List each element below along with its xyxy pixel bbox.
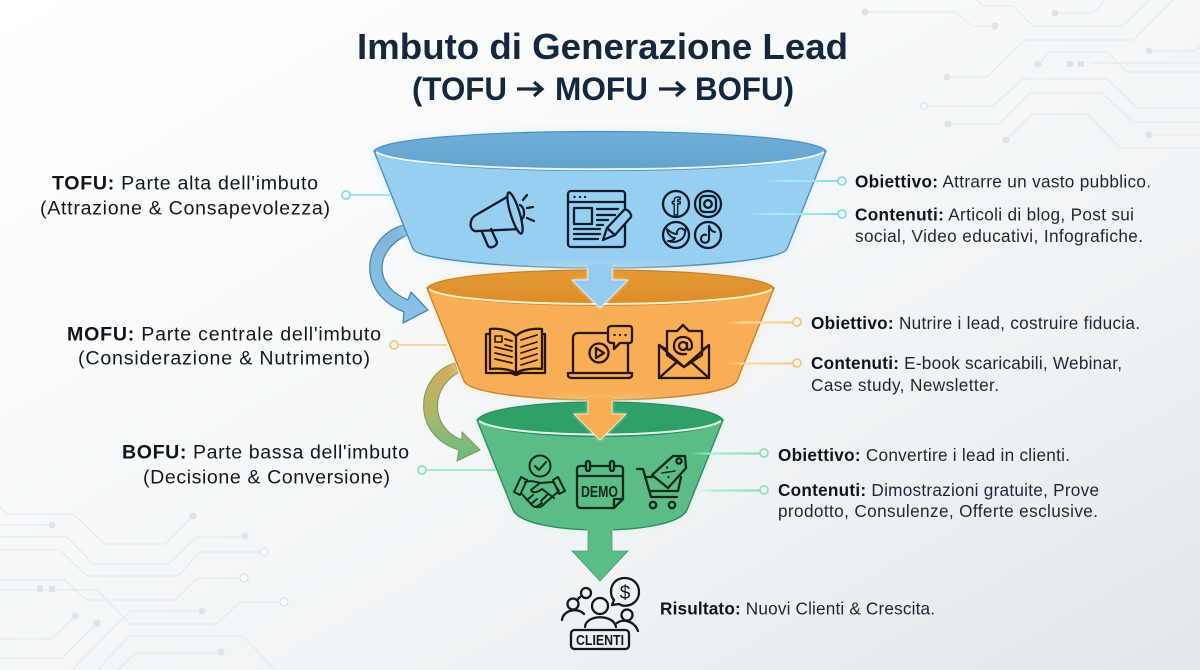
text: TOFU contents	[855, 204, 1143, 246]
text: TOFU label	[40, 172, 330, 220]
text: TOFU label: (Attrazione & Consapevolezza)	[40, 198, 330, 220]
text: MOFU label: MOFU: Parte centrale dell'imbuto	[67, 324, 381, 346]
text: MOFU label	[67, 324, 381, 370]
connector: TOFU contents	[748, 210, 846, 218]
text: BOFU objective: Obiettivo: Convertire i lead in clienti.	[778, 445, 1070, 465]
icon: laptop webinar	[568, 326, 632, 378]
icon: megaphone	[471, 191, 534, 247]
text: result: Risultato: Nuovi Clienti & Crescita.	[660, 598, 935, 618]
icon: email envelope	[659, 325, 709, 378]
icon: demo calendar: DEMO	[581, 484, 618, 501]
icon: demo calendar	[577, 461, 623, 508]
connector: TOFU objective	[765, 177, 846, 185]
curved arrow: TOFU to MOFU	[370, 225, 428, 323]
panel: TOFU funnel section	[342, 132, 846, 268]
panel: BOFU funnel section	[418, 400, 768, 530]
text: MOFU contents: Case study, Newsletter.	[811, 375, 999, 395]
text: BOFU contents: Contenuti: Dimostrazioni gratuite, Prove	[778, 480, 1099, 500]
icon: article with pencil	[568, 191, 631, 247]
text: BOFU contents: prodotto, Consulenze, Offerte esclusive.	[778, 501, 1098, 521]
text: TOFU contents: Contenuti: Articoli di blog, Post sui	[855, 204, 1134, 224]
text: MOFU contents	[811, 353, 1122, 395]
icon: shopping cart with tag	[637, 456, 686, 508]
connector: BOFU left	[418, 466, 496, 474]
icon: handshake with check	[514, 456, 565, 507]
text: BOFU label: (Decisione & Conversione)	[143, 466, 390, 488]
text: TOFU label: TOFU: Parte alta dell'imbuto	[52, 172, 318, 194]
title: (TOFU	[412, 71, 507, 107]
connector: MOFU objective	[725, 318, 801, 326]
title: MOFU	[555, 71, 648, 107]
text: BOFU label: BOFU: Parte bassa dell'imbuto	[122, 442, 409, 464]
connector: BOFU contents	[695, 486, 768, 494]
arrow: BOFU down	[572, 527, 628, 581]
title	[357, 26, 848, 107]
icon: social media	[663, 191, 721, 248]
panel: MOFU funnel section	[390, 268, 801, 400]
connector: MOFU left	[390, 341, 447, 349]
text: BOFU label	[122, 442, 409, 488]
text: MOFU contents: Contenuti: E-book scaricabili, Webinar,	[811, 353, 1122, 373]
connector: TOFU left	[342, 191, 390, 199]
text: MOFU label: (Considerazione & Nutrimento)	[78, 348, 370, 370]
connector: MOFU contents	[725, 359, 801, 367]
icon: social media: f	[672, 193, 681, 221]
arrow: MOFU down	[574, 397, 626, 440]
icon: open book	[486, 329, 545, 375]
text: MOFU objective: Obiettivo: Nutrire i lead, costruire fiducia.	[811, 313, 1140, 333]
text: TOFU contents: social, Video educativi, Infografiche.	[855, 226, 1143, 246]
title: BOFU)	[695, 71, 794, 107]
connector: BOFU objective	[690, 449, 768, 457]
icon: new customers: CLIENTI	[576, 633, 624, 649]
title: Imbuto di Generazione Lead	[357, 26, 848, 67]
icon: new customers: $	[620, 583, 631, 604]
text: TOFU objective: Obiettivo: Attrarre un vasto pubblico.	[855, 172, 1151, 192]
icon: new customers	[562, 578, 639, 649]
arrow: TOFU down	[572, 264, 628, 308]
curved arrow: MOFU to BOFU	[424, 363, 480, 461]
text: BOFU contents	[778, 480, 1099, 521]
